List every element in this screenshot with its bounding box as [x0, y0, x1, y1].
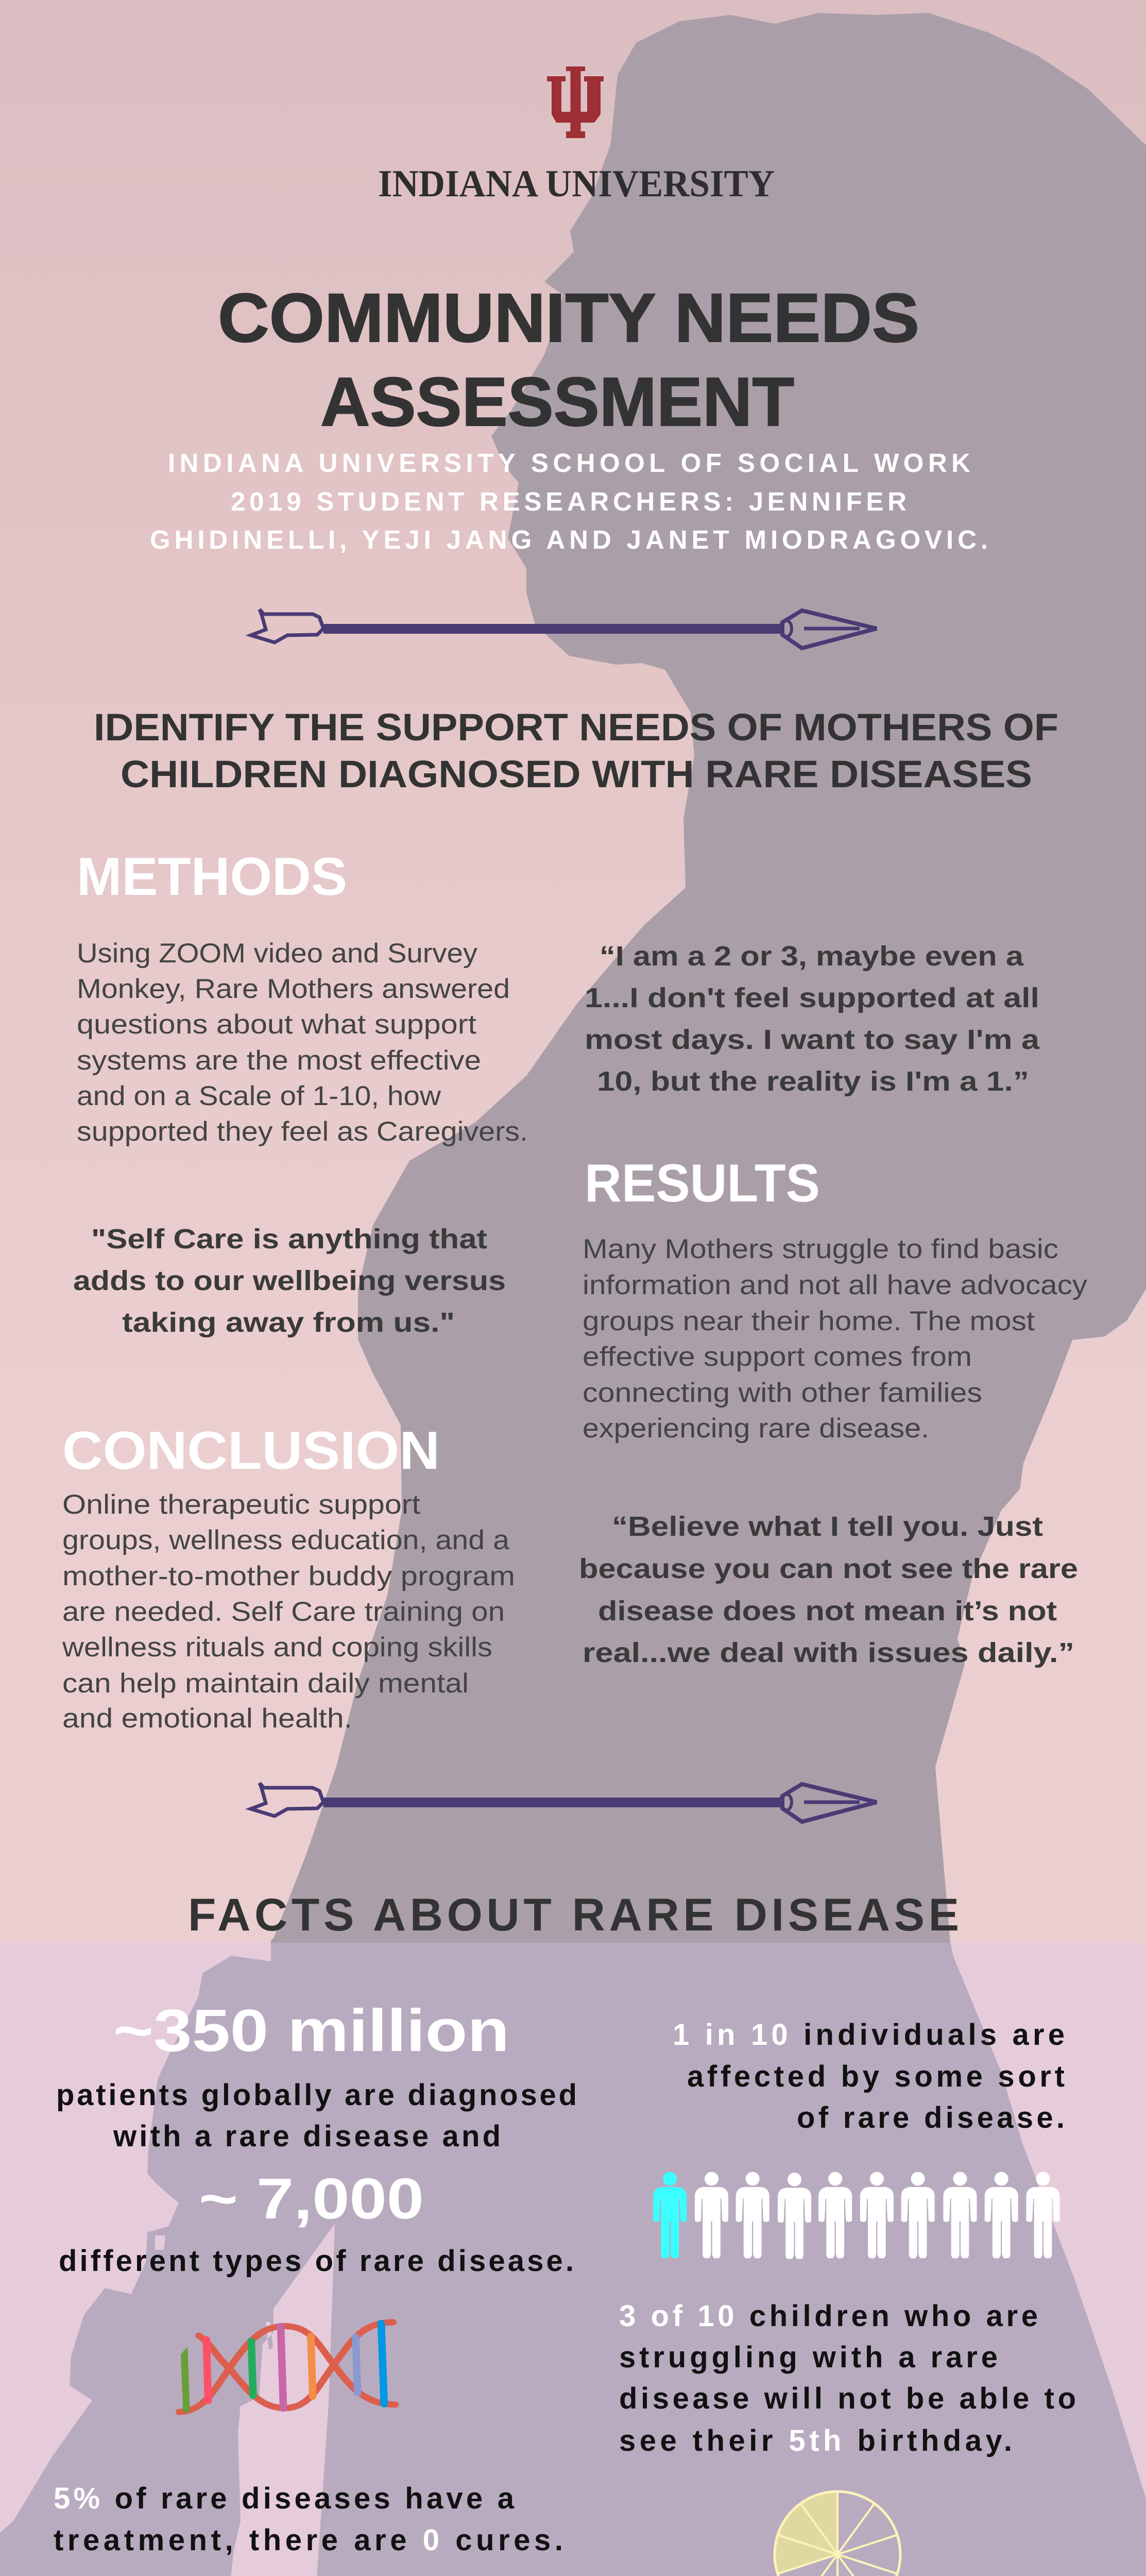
title: ASSESSMENT — [320, 364, 794, 440]
text block: methods — [77, 938, 528, 1147]
text block: 1 in 10 individuals: of rare disease. — [797, 2101, 1065, 2134]
text block: conclusion: mother-to-mother buddy program — [62, 1561, 515, 1591]
text block: conclusion: Online therapeutic support — [62, 1489, 420, 1520]
quote: self care: adds to our wellbeing versus — [73, 1265, 506, 1296]
text block: results: groups near their home. The most — [583, 1306, 1035, 1336]
quote: self care: taking away from us." — [122, 1307, 455, 1338]
text block: 3 of 10 children — [619, 2299, 1076, 2458]
text block: 3 of 10 children: struggling with a rare — [619, 2341, 998, 2374]
quote: support scale: “I am a 2 or 3, maybe even a — [600, 941, 1024, 972]
text block: 3 of 10 children: 3 of 10 children who are — [619, 2299, 1038, 2333]
chart: pie showing 3 of 10 — [774, 2490, 900, 2576]
text block: patients globally: with a rare disease and — [113, 2120, 501, 2153]
text block: 3 of 10 children: disease will not be able to — [619, 2382, 1076, 2415]
quote: believe what I tell you: because you can not see the rare — [579, 1553, 1078, 1584]
text block: patients globally: patients globally are diagnosed — [56, 2078, 577, 2112]
text block: results: connecting with other families — [583, 1378, 982, 1408]
arrow divider: top — [251, 609, 877, 648]
text block: 1 in 10 individuals: affected by some sort — [687, 2060, 1065, 2093]
text block: results: effective support comes from — [583, 1342, 972, 1372]
quote: support scale — [585, 941, 1040, 1097]
title: COMMUNITY NEEDS — [218, 280, 919, 357]
icon: DNA helix — [179, 2322, 396, 2412]
text block: results — [583, 1234, 1088, 1444]
title — [218, 280, 919, 440]
text block: conclusion: can help maintain daily mental — [62, 1668, 469, 1699]
text block: conclusion: and emotional health. — [62, 1703, 352, 1734]
quote: support scale: 10, but the reality is I'm a 1.” — [597, 1066, 1029, 1097]
quote: support scale: 1...I don't feel supported at all — [585, 982, 1039, 1013]
text block: methods: systems are the most effective — [77, 1045, 481, 1076]
quote: self care — [73, 1224, 506, 1338]
Indiana University wordmark: INDIANA UNIVERSITY — [378, 163, 775, 205]
text block: methods: Using ZOOM video and Survey — [77, 938, 478, 969]
subtitle: researchers: INDIANA UNIVERSITY SCHOOL OF SOCIAL WORK — [168, 448, 970, 478]
text block: methods: and on a Scale of 1-10, how — [77, 1081, 441, 1111]
text block: results: information and not all have advocacy — [583, 1270, 1088, 1300]
lower facts band overlay — [0, 1943, 1146, 2576]
text block: methods: Monkey, Rare Mothers answered — [77, 974, 510, 1004]
quote: support scale: most days. I want to say I'm a — [585, 1024, 1040, 1055]
text block: patients globally — [56, 2078, 577, 2153]
heading: aim of assessment: IDENTIFY THE SUPPORT NEEDS OF MOTHERS OF — [94, 706, 1058, 749]
text block: methods: supported they feel as Caregivers. — [77, 1116, 528, 1147]
text block: 3 of 10 children: see their 5th birthday. — [619, 2424, 1012, 2458]
heading: results: RESULTS — [585, 1154, 820, 1213]
subtitle: researchers: GHIDINELLI, YEJI JANG AND JANET MIODRAGOVIC. — [150, 525, 988, 554]
heading: methods: METHODS — [77, 847, 347, 907]
text block: 1 in 10 individuals — [673, 2018, 1065, 2134]
text block: conclusion: are needed. Self Care training on — [62, 1597, 505, 1627]
quote: believe what I tell you: “Believe what I tell you. Just — [612, 1511, 1043, 1542]
quote: believe what I tell you — [579, 1511, 1078, 1668]
heading: aim of assessment — [94, 706, 1058, 795]
text block: treatment: treatment, there are 0 cures. — [54, 2523, 563, 2557]
text block: treatment — [54, 2482, 563, 2557]
quote: believe what I tell you: disease does not mean it’s not — [598, 1596, 1057, 1626]
stat: 7,000: ~ 7,000 — [199, 2166, 424, 2231]
text block: conclusion: wellness rituals and coping skills — [62, 1632, 492, 1663]
quote: believe what I tell you: real...we deal with issues daily.” — [583, 1637, 1074, 1668]
text block: different types: different types of rare disease. — [59, 2244, 574, 2278]
text block: conclusion — [62, 1489, 515, 1734]
text block: results: experiencing rare disease. — [583, 1413, 929, 1444]
subtitle: researchers: 2019 STUDENT RESEARCHERS: JENNIFER — [231, 487, 906, 516]
icon: ten people, one highlighted — [653, 2172, 1059, 2259]
text block: results: Many Mothers struggle to find basic — [583, 1234, 1058, 1264]
heading: aim of assessment: CHILDREN DIAGNOSED WITH RARE DISEASES — [121, 753, 1032, 795]
subtitle: researchers — [150, 448, 988, 554]
icon: Indiana University trident — [547, 66, 604, 138]
text block: 1 in 10 individuals: 1 in 10 individuals are — [673, 2018, 1065, 2052]
text block: treatment: 5% of rare diseases have a — [54, 2482, 515, 2515]
heading: conclusion: CONCLUSION — [62, 1421, 440, 1481]
text block: conclusion: groups, wellness education, and a — [62, 1525, 510, 1555]
stat: 350 million: ~350 million — [113, 1997, 509, 2064]
arrow divider: lower — [251, 1783, 877, 1822]
quote: self care: "Self Care is anything that — [91, 1224, 487, 1255]
heading: facts about rare disease: FACTS ABOUT RARE DISEASE — [188, 1889, 959, 1940]
text block: methods: questions about what support — [77, 1009, 476, 1040]
